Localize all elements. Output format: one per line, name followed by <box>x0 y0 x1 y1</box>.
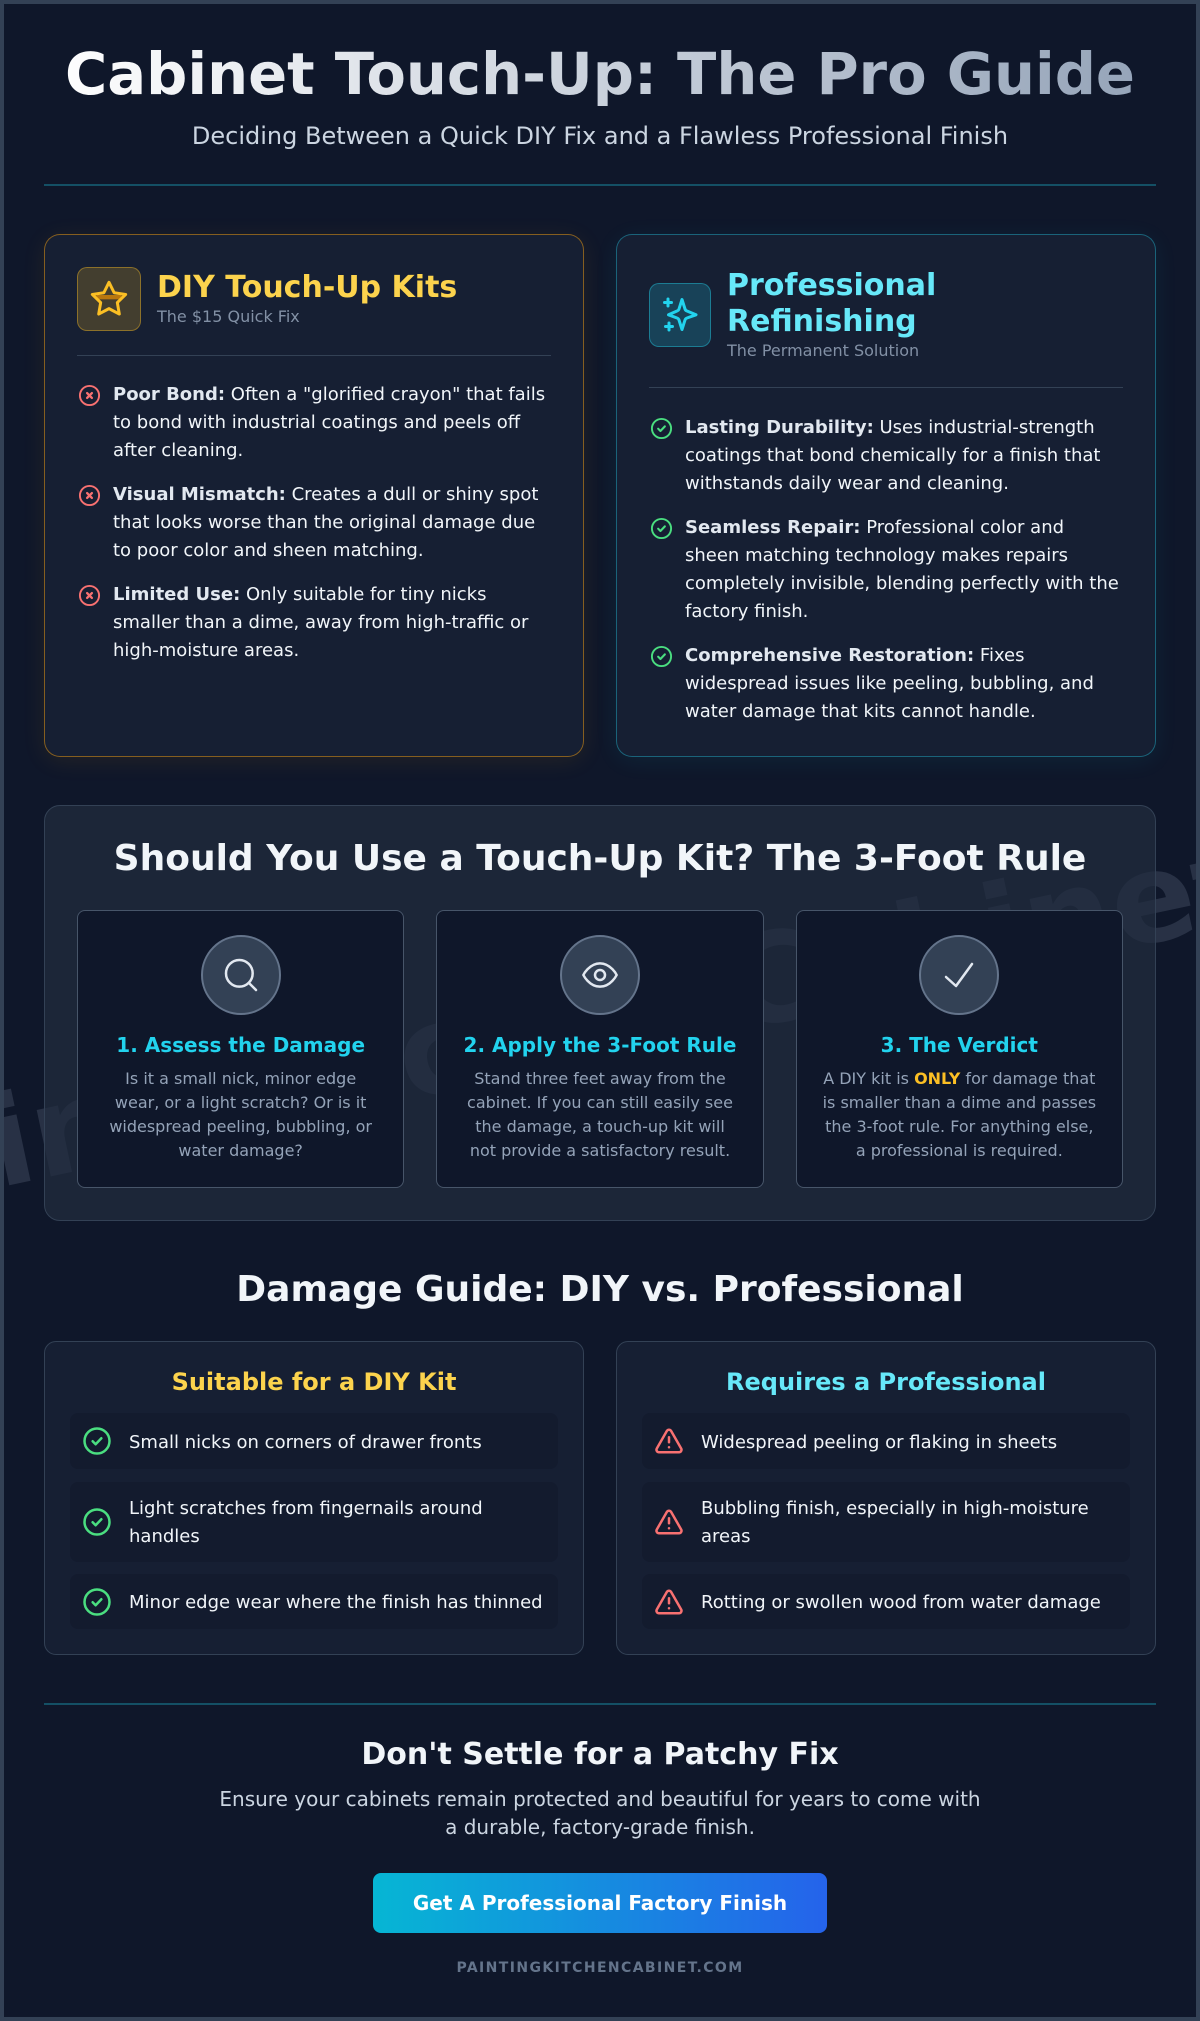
damage guide heading: Damage Guide: DIY vs. Professional <box>236 1269 964 1310</box>
DIY point: poor bond: to bond with industrial coatings and peels off <box>113 412 520 433</box>
professional point: seamless repair: factory finish. <box>685 600 808 622</box>
DIY point: poor bond <box>78 384 545 461</box>
step 2: apply the 3-foot rule: 2. Apply the 3-Foot Rule <box>464 1033 736 1057</box>
DIY point: limited use: Limited Use: Only suitable for tiny nicks <box>113 584 486 605</box>
DIY point: limited use: high-moisture areas. <box>113 640 299 661</box>
DIY point: visual mismatch: to poor color and sheen matching. <box>113 540 424 561</box>
icon: sparkles <box>649 283 711 347</box>
professional heading <box>726 268 936 360</box>
professional heading: Professional <box>727 268 936 303</box>
step 1: assess the damage: water damage? <box>178 1141 303 1160</box>
step 1: assess the damage <box>77 910 404 1188</box>
step 1: assess the damage: widespread peeling, bubbling, or <box>109 1117 372 1136</box>
step 2: apply the 3-foot rule: Stand three feet away from the <box>474 1069 726 1088</box>
subtitle: Deciding Between a Quick DIY Fix and a Flawless Professional Finish <box>192 122 1008 150</box>
panel: DIY touch-up kits <box>44 234 584 757</box>
professional heading: The Permanent Solution <box>727 341 919 360</box>
icon: magnifier <box>201 935 281 1015</box>
professional point: seamless repair: completely invisible, blending perfectly with the <box>685 572 1119 594</box>
step 1: assess the damage: Is it a small nick, minor edge <box>125 1069 356 1088</box>
panel: professional refinishing <box>616 234 1156 757</box>
step 3: the verdict: 3. The Verdict <box>881 1033 1038 1057</box>
professional point: seamless repair <box>650 516 1119 622</box>
DIY heading <box>156 270 457 326</box>
item: small nicks <box>70 1413 558 1469</box>
DIY heading: The $15 Quick Fix <box>157 307 300 326</box>
panel: requires a professional <box>616 1341 1156 1655</box>
step 3: the verdict <box>796 910 1123 1188</box>
item: widespread peeling <box>642 1413 1130 1469</box>
professional point: lasting durability <box>650 416 1100 494</box>
item: light scratches: Light scratches from fingernails around <box>129 1498 483 1519</box>
step 3: the verdict: the 3-foot rule. For anything else, <box>825 1117 1093 1136</box>
professional point: comprehensive restoration <box>650 644 1094 722</box>
step 2: apply the 3-foot rule: cabinet. If you can still easily see <box>467 1093 733 1112</box>
icon: eye <box>560 935 640 1015</box>
rule heading: Should You Use a Touch-Up Kit? The 3-Foot Rule <box>114 838 1086 879</box>
item: minor edge wear <box>70 1574 558 1629</box>
DIY point: limited use <box>78 584 528 661</box>
professional point: comprehensive restoration: water damage that kits cannot handle. <box>685 700 1036 722</box>
item: bubbling finish <box>642 1482 1130 1562</box>
DIY heading: DIY Touch-Up Kits <box>157 270 457 305</box>
item: minor edge wear: Minor edge wear where the finish has thinned <box>129 1592 543 1612</box>
item: small nicks: Small nicks on corners of drawer fronts <box>129 1432 482 1453</box>
professional point: seamless repair: Seamless Repair: Professional color and <box>685 516 1064 538</box>
step 1: assess the damage: 1. Assess the Damage <box>116 1033 365 1057</box>
professional point: seamless repair: sheen matching technology makes repairs <box>685 544 1068 566</box>
DIY point: poor bond: after cleaning. <box>113 440 243 461</box>
item: bubbling finish: Bubbling finish, especially in high-moisture <box>701 1498 1089 1519</box>
step 3: the verdict: is smaller than a dime and passes <box>823 1093 1096 1112</box>
professional point: lasting durability: coatings that bond chemically for a finish that <box>685 444 1100 466</box>
website credit: PAINTINGKITCHENCABINET.COM <box>456 1960 744 1976</box>
item: light scratches: handles <box>129 1526 200 1547</box>
step 2: apply the 3-foot rule: not provide a satisfactory result. <box>470 1141 730 1160</box>
step 2: apply the 3-foot rule <box>436 910 764 1188</box>
panel: suitable for a DIY kit <box>44 1341 584 1655</box>
icon: check <box>919 935 999 1015</box>
call-to-action button: Get A Professional Factory Finish <box>413 1891 787 1915</box>
professional panel header <box>649 267 1123 388</box>
panel: requires a professional: Requires a Professional <box>726 1368 1046 1396</box>
DIY point: poor bond: Poor Bond: Often a "glorified crayon" that fails <box>113 384 545 405</box>
footer text <box>219 1787 981 1839</box>
professional point: lasting durability: Lasting Durability: Uses industrial-strength <box>685 416 1095 438</box>
panel: suitable for a DIY kit: Suitable for a DIY Kit <box>172 1368 456 1396</box>
DIY point: visual mismatch: Visual Mismatch: Creates a dull or shiny spot <box>113 484 538 505</box>
professional point: lasting durability: withstands daily wear and cleaning. <box>685 472 1009 494</box>
icon: star <box>77 267 141 331</box>
step 2: apply the 3-foot rule: the damage, a touch-up kit will <box>475 1117 725 1136</box>
item: rotting wood: Rotting or swollen wood from water damage <box>701 1592 1101 1612</box>
footer text: Ensure your cabinets remain protected and beautiful for years to come with <box>219 1787 981 1811</box>
DIY point: visual mismatch: that looks worse than the original damage due <box>113 512 535 533</box>
footer text: a durable, factory-grade finish. <box>445 1815 755 1839</box>
DIY point: visual mismatch <box>78 484 538 561</box>
call-to-action button <box>373 1873 827 1933</box>
title: Cabinet Touch-Up: The Pro Guide <box>65 41 1135 108</box>
item: widespread peeling: Widespread peeling or flaking in sheets <box>701 1432 1057 1453</box>
item: bubbling finish: areas <box>701 1526 751 1547</box>
step 1: assess the damage: wear, or a light scratch? Or is it <box>115 1093 366 1112</box>
item: rotting wood <box>642 1574 1130 1629</box>
item: light scratches <box>70 1482 558 1562</box>
footer heading: Don't Settle for a Patchy Fix <box>361 1737 839 1772</box>
professional heading: Refinishing <box>727 304 917 339</box>
professional point: comprehensive restoration: widespread issues like peeling, bubbling, and <box>685 672 1094 694</box>
DIY panel header <box>77 267 551 356</box>
DIY point: limited use: smaller than a dime, away from high-traffic or <box>113 612 528 633</box>
step 3: the verdict: A DIY kit is ONLY for damage that <box>823 1069 1095 1088</box>
panel: 3-foot rule <box>44 805 1156 1221</box>
professional point: comprehensive restoration: Comprehensive Restoration: Fixes <box>685 644 1024 666</box>
step 3: the verdict: a professional is required. <box>856 1141 1063 1160</box>
